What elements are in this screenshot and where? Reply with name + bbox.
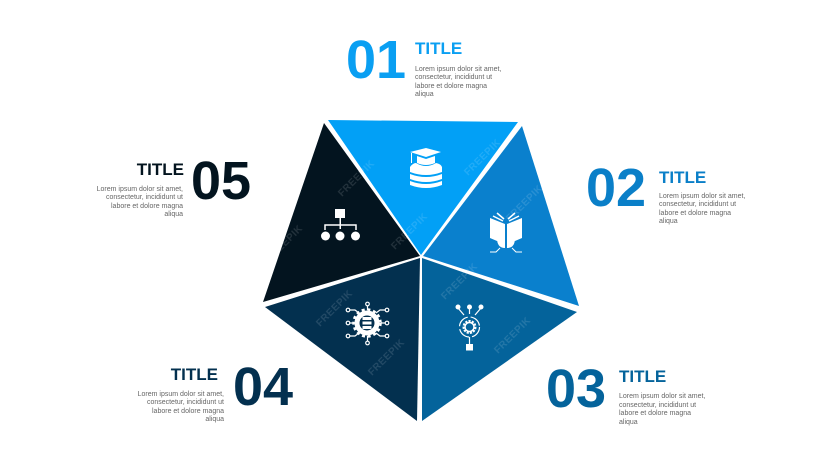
body 04 xyxy=(138,391,224,423)
body 01 xyxy=(415,66,501,98)
icon: graduation cap on database xyxy=(410,148,442,188)
body 02: labore et dolore magna xyxy=(659,210,731,217)
icon: data gear circuit xyxy=(346,302,389,345)
body 01: Lorem ipsum dolor sit amet, xyxy=(415,66,501,73)
number 04: 04 xyxy=(233,357,293,417)
segment 1 xyxy=(328,120,518,255)
pentagon chart xyxy=(263,120,579,421)
body 05: Lorem ipsum dolor sit amet, xyxy=(97,186,183,193)
title 05: TITLE xyxy=(137,160,184,179)
title 01: TITLE xyxy=(415,39,462,58)
block 03 xyxy=(546,359,705,426)
body 03: Lorem ipsum dolor sit amet, xyxy=(619,393,705,400)
segment 4 xyxy=(265,258,420,421)
body 03: aliqua xyxy=(619,419,638,426)
icon: gear with nodes xyxy=(456,304,484,350)
watermarks: FREEPIK xyxy=(336,158,377,199)
body 05: consectetur, incididunt ut xyxy=(106,194,183,201)
block 05 xyxy=(97,151,251,218)
segment 3 xyxy=(422,258,577,421)
body 01: labore et dolore magna xyxy=(415,83,487,90)
watermarks: FREEPIK xyxy=(366,337,407,378)
number 03: 03 xyxy=(546,359,606,419)
watermarks: FREEPIK xyxy=(439,261,480,302)
number 05: 05 xyxy=(191,151,251,211)
watermarks: FREEPIK xyxy=(492,315,533,356)
title 04: TITLE xyxy=(171,365,218,384)
body 02: Lorem ipsum dolor sit amet, xyxy=(659,193,745,200)
body 03: labore et dolore magna xyxy=(619,410,691,417)
body 01: aliqua xyxy=(415,91,434,98)
number 01: 01 xyxy=(346,30,406,90)
title 03: TITLE xyxy=(619,367,666,386)
watermarks xyxy=(264,137,545,378)
body 05: labore et dolore magna xyxy=(111,203,183,210)
block 02 xyxy=(586,158,745,225)
body 04: consectetur, incididunt ut xyxy=(147,399,224,406)
body 02: aliqua xyxy=(659,218,678,225)
number 02: 02 xyxy=(586,158,646,218)
body 05: aliqua xyxy=(164,211,183,218)
watermarks: FREEPIK xyxy=(462,137,503,178)
watermarks: FREEPIK xyxy=(504,183,545,224)
body 01: consectetur, incididunt ut xyxy=(415,74,492,81)
watermarks: FREEPIK xyxy=(389,211,430,252)
block 04 xyxy=(138,357,293,423)
watermarks: FREEPIK xyxy=(264,223,305,264)
segment 5 xyxy=(263,123,420,302)
body 04: labore et dolore magna xyxy=(152,408,224,415)
body 05 xyxy=(97,186,183,218)
watermarks: FREEPIK xyxy=(314,288,355,329)
body 03 xyxy=(619,393,705,426)
body 04: Lorem ipsum dolor sit amet, xyxy=(138,391,224,398)
body 02 xyxy=(659,193,745,225)
title 02: TITLE xyxy=(659,168,706,187)
body 03: consectetur, incididunt ut xyxy=(619,402,696,409)
body 04: aliqua xyxy=(205,416,224,423)
block 01 xyxy=(346,30,501,98)
icon: hierarchy xyxy=(321,209,360,240)
body 02: consectetur, incididunt ut xyxy=(659,201,736,208)
segment 2 xyxy=(423,126,579,306)
icon: book and brain xyxy=(490,213,522,252)
